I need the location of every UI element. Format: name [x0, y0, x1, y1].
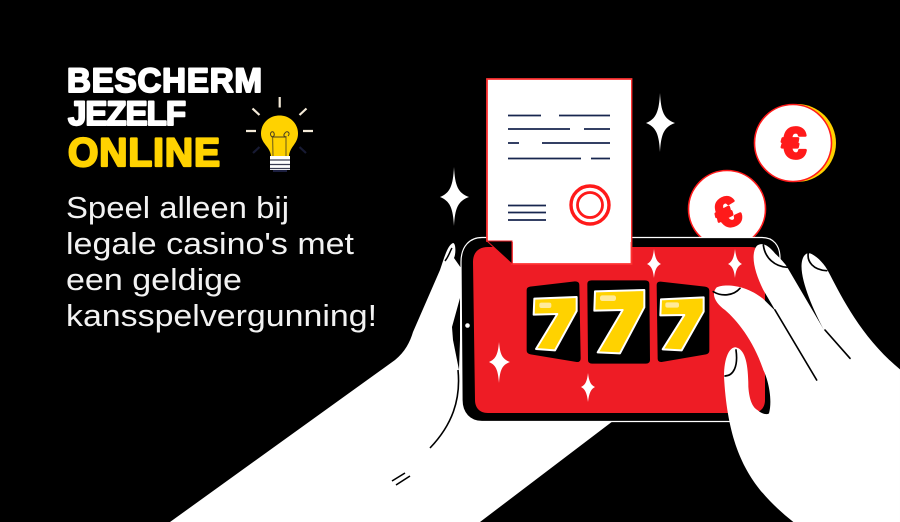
body text: legale casino's met — [66, 226, 354, 261]
left hand and arm — [170, 243, 640, 522]
phone — [461, 238, 780, 422]
phone camera dot — [465, 323, 470, 328]
body text: kansspelvergunning! — [66, 298, 377, 333]
icon: euro coin top: € — [782, 119, 806, 168]
document text lines — [508, 116, 610, 220]
document fold — [487, 241, 512, 264]
title: ONLINE — [68, 130, 220, 175]
finger creases — [775, 310, 850, 380]
icon: sparkle top right — [646, 93, 675, 152]
document seal — [571, 186, 609, 224]
right hand — [713, 244, 900, 522]
icon: sparkle left — [440, 167, 469, 226]
icon: euro coin behind phone: € — [706, 186, 749, 239]
icon: light bulb — [246, 97, 313, 172]
finger nails — [713, 245, 827, 376]
title: JEZELF — [68, 96, 186, 133]
document — [487, 79, 632, 264]
icon: euro coin top — [754, 104, 836, 182]
slot machine reels — [527, 280, 709, 364]
icon: screen sparkles — [489, 249, 742, 402]
body text — [66, 190, 377, 333]
icon: euro coin behind phone — [688, 170, 766, 248]
body text: een geldige — [66, 262, 242, 297]
body text: Speel alleen bij — [66, 190, 289, 225]
phone screen — [473, 247, 765, 413]
title: BESCHERM — [67, 63, 262, 100]
title — [67, 63, 262, 175]
